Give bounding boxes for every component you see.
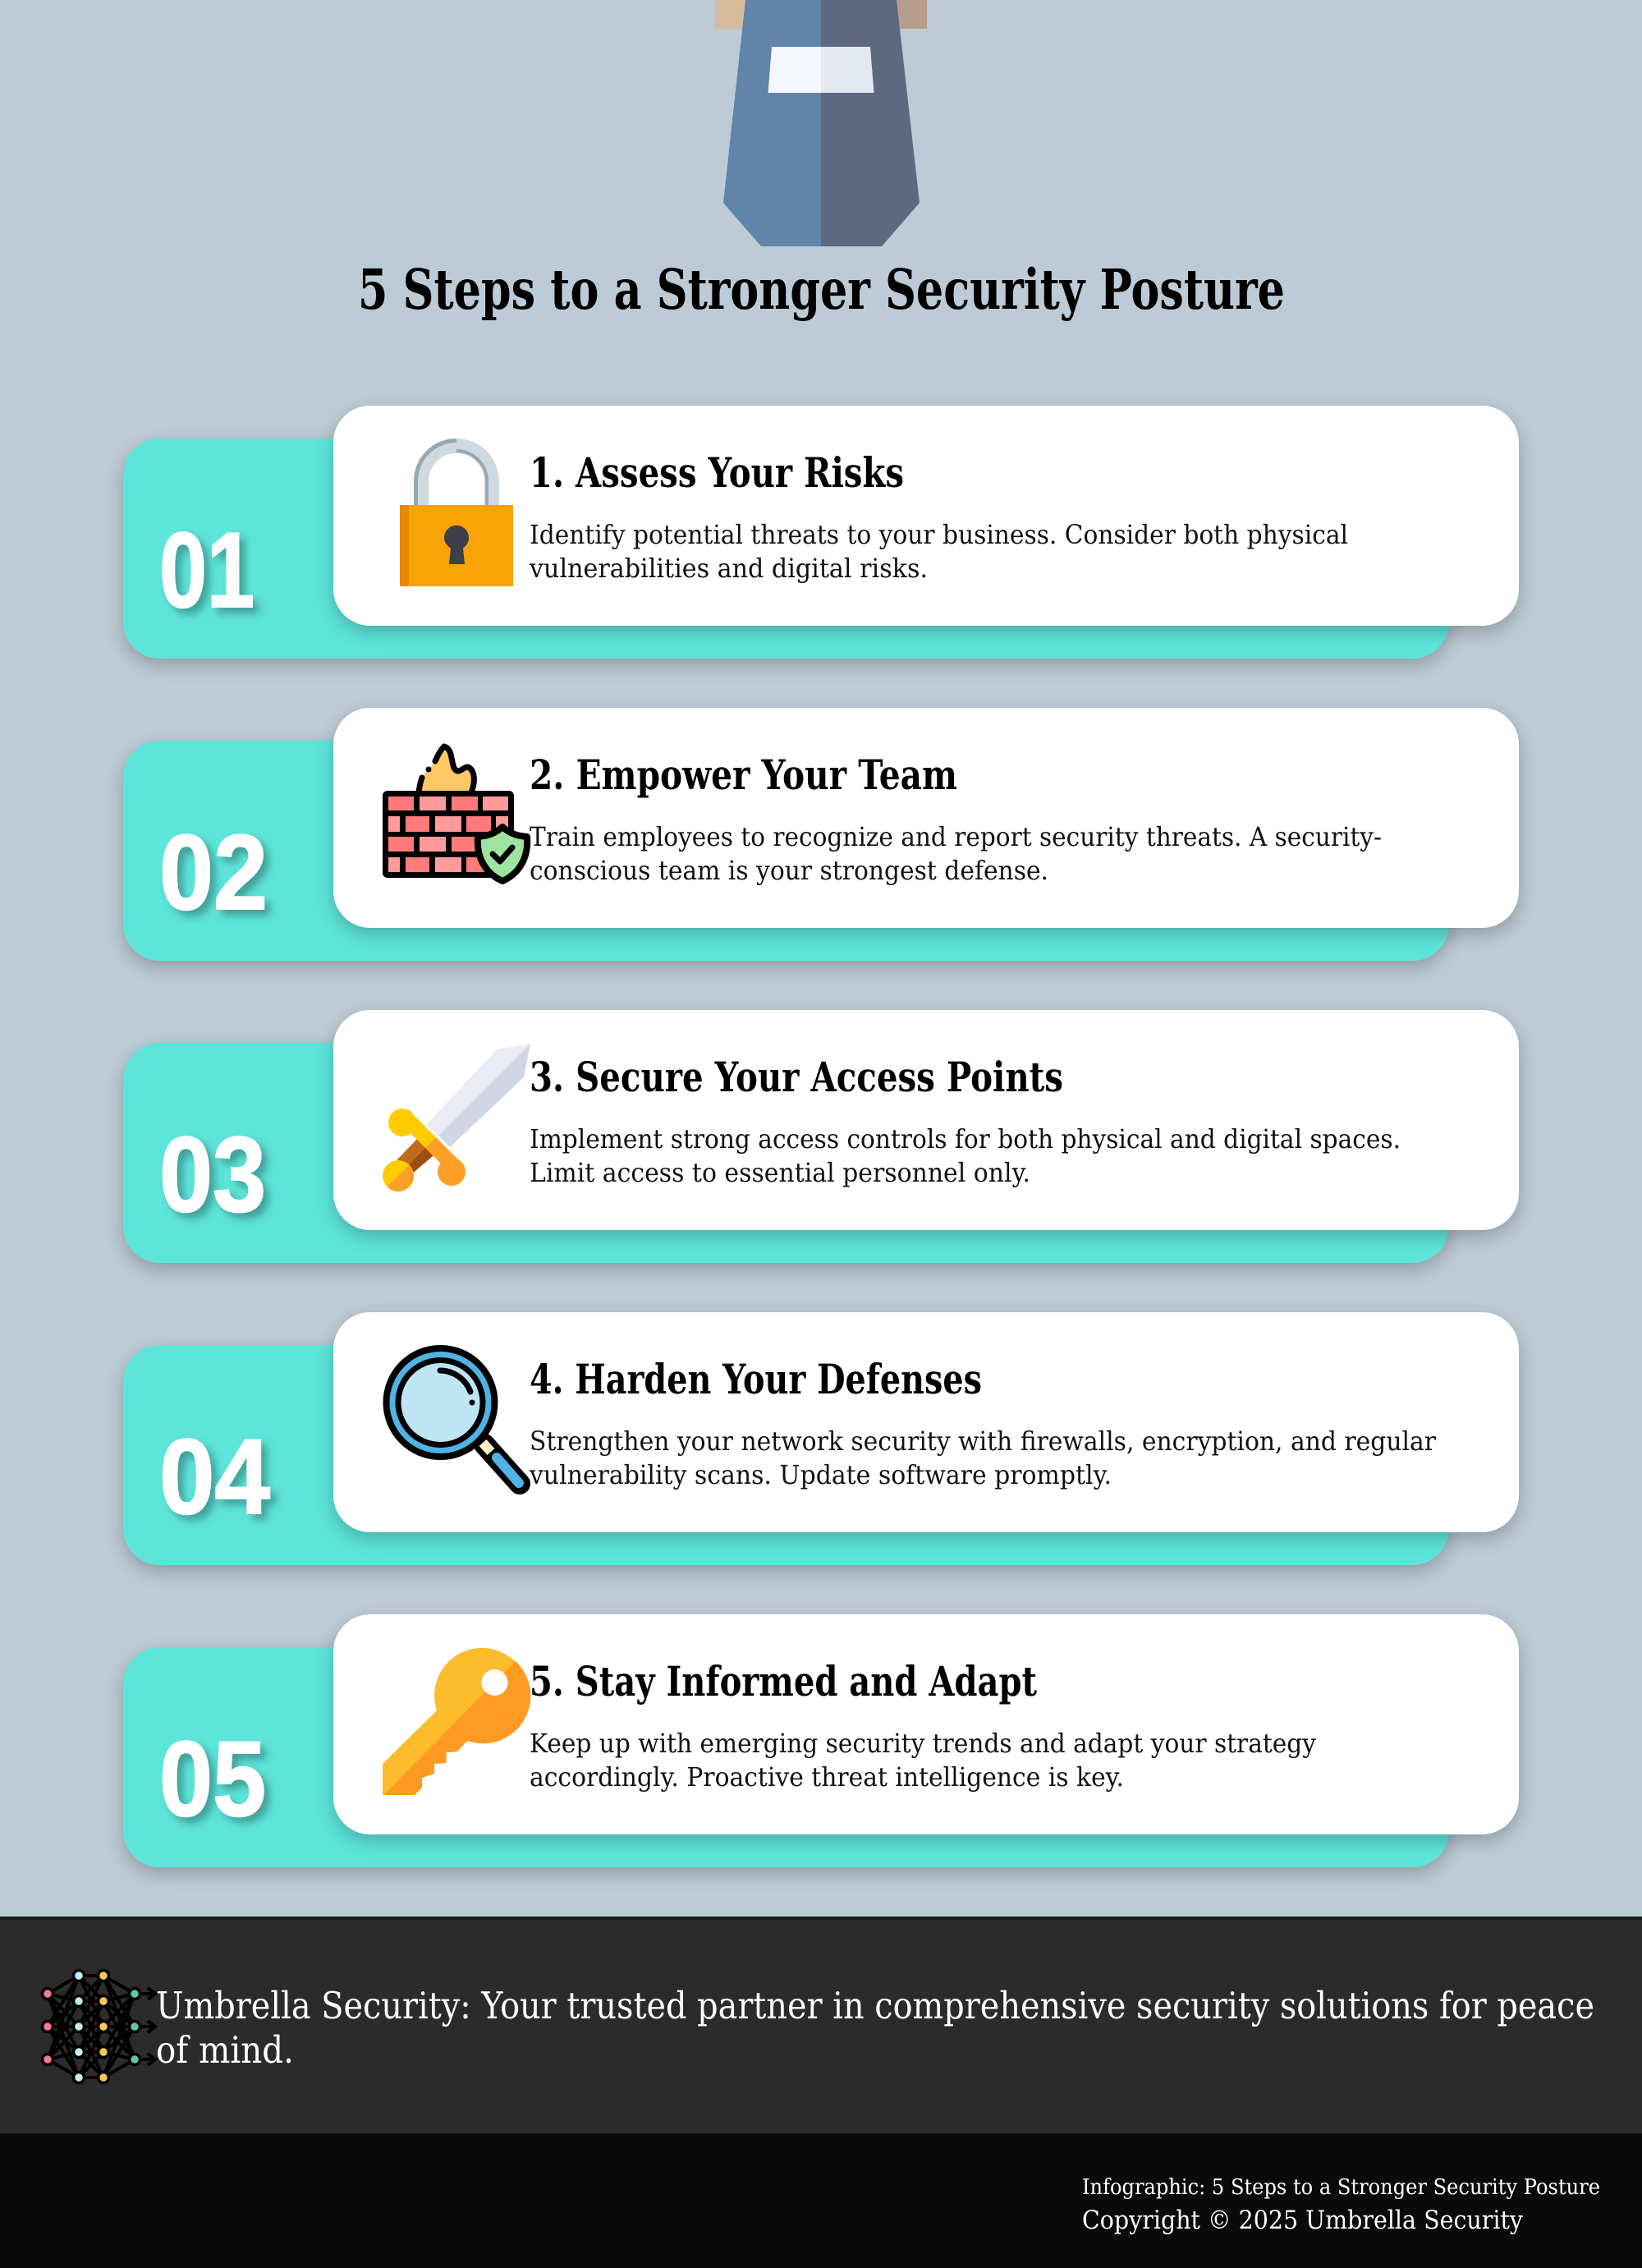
- icon: neural network: [43, 1971, 155, 2082]
- number band 05: [123, 1647, 1449, 1867]
- step number 01: 01: [159, 510, 255, 630]
- step number 02: 02: [159, 812, 268, 932]
- step number 03: 03: [159, 1114, 266, 1234]
- step 2 description: conscious team is your strongest defense.: [530, 855, 1048, 886]
- step 4 description: [529, 1426, 1437, 1490]
- step 1 description: vulnerabilities and digital risks.: [529, 553, 928, 584]
- banner text: [156, 1984, 1594, 2072]
- icon: padlock: [400, 440, 513, 586]
- number band 01: [123, 438, 1449, 659]
- step number 04: 04: [159, 1416, 270, 1536]
- icon: key: [383, 1648, 530, 1795]
- card 5: [333, 1614, 1519, 1834]
- step 3 description: [530, 1123, 1401, 1188]
- icon: sword: [383, 1044, 530, 1191]
- card 3: [333, 1010, 1519, 1230]
- step 3 heading: 3. Secure Your Access Points: [530, 1053, 1063, 1101]
- panel: step 3: [123, 1010, 1519, 1263]
- panel: company banner: [0, 1917, 1642, 2133]
- panel: step 5: [123, 1614, 1519, 1867]
- step 4 heading: 4. Harden Your Defenses: [530, 1355, 982, 1403]
- step 2 description: Train employees to recognize and report security threats. A security-: [530, 821, 1382, 852]
- icon: firewall with shield: [383, 746, 527, 881]
- footer copyright: Copyright © 2025 Umbrella Security: [1082, 2206, 1523, 2235]
- number band 03: [123, 1043, 1449, 1263]
- footer infographic title: Infographic: 5 Steps to a Stronger Security Posture: [1082, 2175, 1600, 2200]
- step 5 description: accordingly. Proactive threat intelligence is key.: [530, 1761, 1124, 1793]
- card 1: [333, 406, 1519, 626]
- step 4 description: vulnerability scans. Update software promptly.: [529, 1459, 1112, 1490]
- icon: magnifying glass: [386, 1348, 520, 1484]
- number band 04: [123, 1345, 1449, 1565]
- panel: footer: [0, 2133, 1642, 2268]
- card 2: [333, 708, 1519, 928]
- card 4: [333, 1312, 1519, 1532]
- number band 02: [123, 741, 1449, 961]
- step 5 description: Keep up with emerging security trends and adapt your strategy: [530, 1728, 1316, 1759]
- step number 05: 05: [159, 1719, 266, 1839]
- step 3 description: Implement strong access controls for both physical and digital spaces.: [530, 1123, 1401, 1155]
- title: 5 Steps to a Stronger Security Posture: [358, 257, 1285, 322]
- step 1 heading: 1. Assess Your Risks: [530, 448, 904, 497]
- panel: step 2: [123, 708, 1519, 961]
- step 3 description: Limit access to essential personnel only.: [530, 1157, 1030, 1188]
- step 1 description: Identify potential threats to your business. Consider both physical: [530, 519, 1348, 550]
- step 5 heading: 5. Stay Informed and Adapt: [530, 1657, 1037, 1706]
- step 2 description: [530, 821, 1382, 886]
- step 1 description: [529, 519, 1348, 584]
- icon: necktie: [715, 0, 927, 246]
- step 4 description: Strengthen your network security with firewalls, encryption, and regular: [530, 1426, 1437, 1457]
- step 2 heading: 2. Empower Your Team: [530, 751, 957, 799]
- step 5 description: [530, 1728, 1316, 1793]
- panel: step 4: [123, 1312, 1519, 1565]
- panel: step 1: [123, 406, 1519, 659]
- banner text: of mind.: [156, 2028, 294, 2072]
